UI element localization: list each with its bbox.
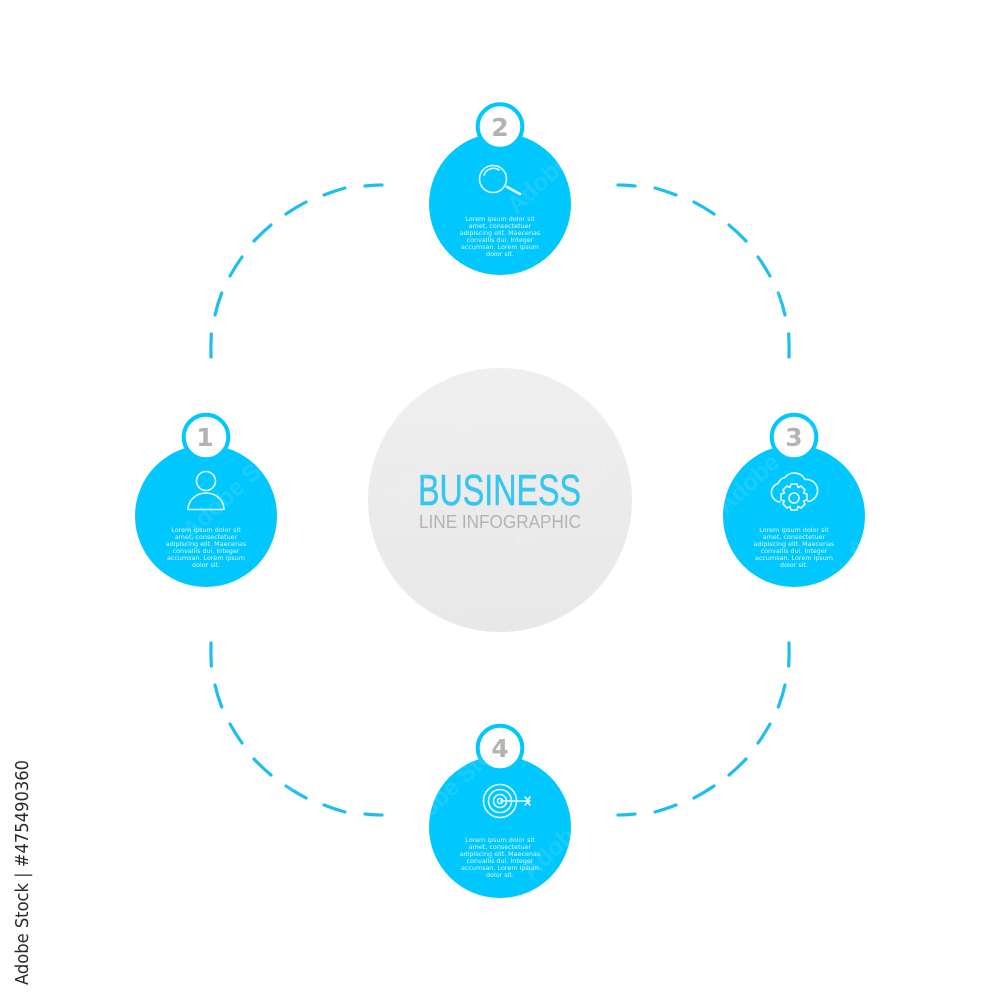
number 1: 1 [196, 423, 214, 452]
watermark pattern: Adobe Stock [832, 114, 958, 234]
text block 3: adipiscing elit. Maecenas [754, 540, 835, 548]
watermark pattern: Adobe Stock [842, 444, 968, 564]
dashed connector: top left [211, 185, 382, 357]
number 2: 2 [491, 113, 509, 142]
text block 1: amet, consectetuer [175, 533, 238, 541]
text block 4: Lorem ipsum dolor sit [465, 836, 535, 844]
text block 3: accumsan. Lorem ipsum [755, 554, 833, 562]
text block 2: accumsan. Lorem ipsum [461, 243, 539, 251]
icon: target [484, 784, 530, 818]
panel: step 4 [429, 726, 571, 898]
watermark pattern: Adobe Stock [382, 394, 508, 514]
watermark pattern: Adobe Stock [377, 62, 503, 182]
watermark pattern: Adobe Stock [852, 779, 978, 899]
text block 1: Lorem ipsum dolor sit [171, 526, 241, 534]
panel: step 1 [135, 415, 277, 587]
text block 2: amet, consectetuer [469, 222, 532, 230]
watermark pattern: Adobe Stock [702, 64, 828, 184]
text block 1: convallis dui. Integer [173, 547, 240, 555]
watermark pattern: Adobe Stock [52, 389, 178, 509]
panel: step 2 [429, 104, 571, 275]
icon: magnifier [480, 166, 520, 194]
text block 3: amet, consectetuer [763, 533, 826, 541]
text block 1: accumsan. Lorem ipsum [167, 554, 245, 562]
dashed connector: top right [618, 185, 789, 357]
number 4: 4 [491, 734, 509, 763]
icon: cloud gear [771, 473, 818, 510]
watermark pattern: Adobe Stock [727, 729, 853, 849]
dashed connector: bottom right [618, 643, 789, 815]
stock id: Adobe Stock | #475490360 [12, 760, 33, 985]
text block 1: adipiscing elit. Maecenas [166, 540, 247, 548]
title: BUSINESS [418, 466, 581, 515]
text block 1: dolor sit. [192, 561, 220, 569]
watermark pattern: Adobe Stock [552, 569, 678, 689]
text block 4: convallis dui. Integer [467, 857, 534, 865]
watermark pattern: Adobe Stock [507, 434, 633, 554]
watermark pattern: Adobe Stock [212, 224, 338, 344]
watermark pattern: Adobe Stock [542, 244, 668, 364]
central circle [368, 368, 632, 632]
text block 2: Lorem ipsum dolor sit [465, 215, 535, 223]
watermark pattern: Adobe Stock [677, 609, 803, 729]
watermark pattern: Adobe Stock [17, 589, 143, 709]
text block 3: convallis dui. Integer [761, 547, 828, 555]
watermark pattern: Adobe Stock [167, 99, 293, 219]
watermark pattern: Adobe Stock [502, 99, 628, 219]
watermark pattern: Adobe Stock [872, 244, 998, 364]
text block 4: accumsan. Lorem ipsum [461, 864, 539, 872]
watermark pattern: Adobe Stock [62, 719, 188, 839]
watermark pattern: Adobe Stock [187, 759, 313, 879]
number 3: 3 [785, 423, 803, 452]
text block 4: adipiscing elit. Maecenas [460, 850, 541, 858]
watermark pattern: Adobe Stock [177, 424, 303, 544]
text block 2: convallis dui. Integer [467, 236, 534, 244]
text block 3: Lorem ipsum dolor sit [759, 526, 829, 534]
text block 4: dolor sit. [486, 871, 514, 879]
watermark pattern: Adobe Stock [7, 259, 133, 379]
watermark pattern: Adobe Stock [337, 264, 463, 384]
watermark pattern: Adobe Stock [517, 764, 643, 884]
text block 2: adipiscing elit. Maecenas [460, 229, 541, 237]
watermark pattern: Adobe Stock [347, 599, 473, 719]
watermark pattern: Adobe Stock [392, 724, 518, 844]
watermark pattern: Adobe Stock [667, 284, 793, 404]
watermark pattern: Adobe Stock [222, 554, 348, 674]
text block 4: amet, consectetuer [469, 843, 532, 851]
watermark pattern: Adobe Stock [712, 399, 838, 519]
dashed connector: bottom left [211, 643, 382, 815]
panel: step 3 [723, 415, 865, 587]
text block 2: dolor sit. [486, 250, 514, 258]
text block 3: dolor sit. [780, 561, 808, 569]
watermark pattern: Adobe Stock [42, 59, 168, 179]
subtitle: LINE INFOGRAPHIC [419, 512, 581, 532]
icon: person [188, 472, 224, 510]
